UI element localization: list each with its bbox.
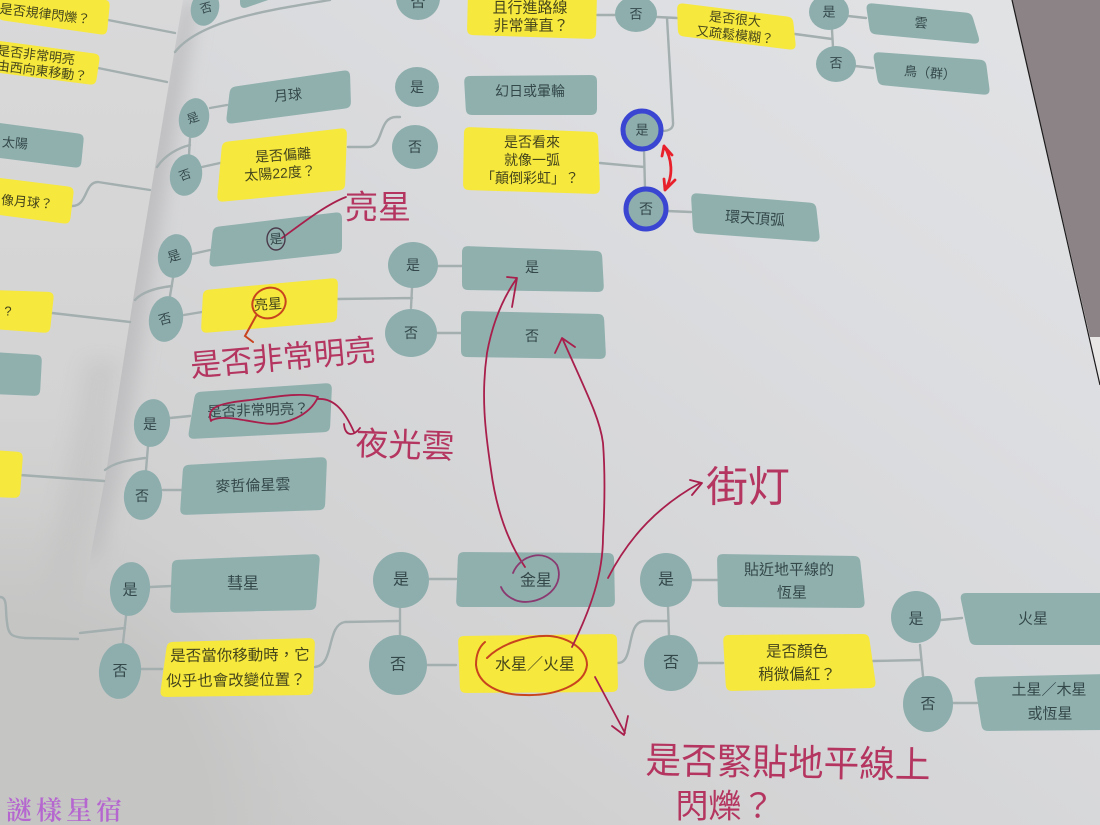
no node xyxy=(145,293,187,345)
handwritten annotations xyxy=(189,188,931,824)
no node: 否 xyxy=(408,139,422,155)
answer box: bright star xyxy=(203,280,336,331)
note: is it flickering near the horizon: 是否緊貼地平線上 xyxy=(645,740,931,786)
partial question xyxy=(0,292,52,331)
partial question: ? xyxy=(4,304,12,318)
answer: Saturn / Jupiter or star: 或恆星 xyxy=(1027,706,1073,722)
question: moves as you move: 似乎也會改變位置？ xyxy=(166,671,306,690)
answer: Venus: 金星 xyxy=(520,572,552,590)
answer: Saturn / Jupiter or star: 土星／木星 xyxy=(1011,682,1087,698)
note: bright star, with pointer xyxy=(267,188,411,250)
no node: 否 xyxy=(135,488,149,504)
question: straight path: 非常筆直？ xyxy=(493,18,569,34)
answer: moon: 月球 xyxy=(273,86,303,104)
question: large and loose xyxy=(679,5,794,48)
answer: Mercury / Mars xyxy=(460,636,616,691)
no node xyxy=(369,635,427,695)
question: inverted rainbow: 是否看來 xyxy=(504,134,560,150)
question: looks like the moon xyxy=(0,179,72,222)
answer: Venus xyxy=(458,554,613,605)
yes node: 是 xyxy=(908,610,924,628)
answer: sundog or halo xyxy=(466,77,595,113)
note: flickering: 閃爍？ xyxy=(676,788,774,824)
yes node: 是 xyxy=(165,247,183,265)
desk behind the book xyxy=(1012,0,1100,337)
bottom flowchart row xyxy=(96,552,1100,732)
answer: cloud: 雲 xyxy=(914,15,928,31)
answer: star near the horizon: 恆星 xyxy=(777,584,807,602)
highlighted yes node: 是 xyxy=(635,122,649,138)
arrow from Mercury/Mars to no box xyxy=(555,338,604,647)
red double arrow xyxy=(662,146,675,190)
page gutter shadow xyxy=(75,0,198,560)
answer: star near the horizon xyxy=(719,556,863,606)
yes node: 是 xyxy=(122,582,138,598)
connector lines xyxy=(0,0,977,703)
question: large and loose: 又疏鬆模糊？ xyxy=(695,23,775,47)
no node: 否 xyxy=(177,166,193,184)
yes node: 是 xyxy=(393,572,409,588)
page edge xyxy=(1012,0,1100,385)
yes node xyxy=(131,397,173,449)
answer: comet xyxy=(172,556,318,611)
answer: Saturn / Jupiter or star xyxy=(976,676,1100,729)
circle on Venus xyxy=(501,555,559,602)
circle and arrow on bright star xyxy=(245,282,291,342)
answer: cloud xyxy=(868,5,978,42)
answer: no: 否 xyxy=(525,328,539,344)
answer box: bright star: 亮星 xyxy=(253,295,283,313)
no node: 否 xyxy=(404,325,418,341)
no node xyxy=(816,46,856,82)
answer: yes: 是 xyxy=(525,259,539,275)
answer box: yes, annotated xyxy=(211,214,340,265)
partial question xyxy=(0,452,21,496)
note: bright star, with pointer: 亮星 xyxy=(345,188,411,226)
no node: 否 xyxy=(390,656,406,674)
no node xyxy=(385,309,437,357)
no node xyxy=(166,151,206,199)
no node xyxy=(396,0,440,20)
yes node xyxy=(640,553,692,607)
yes node xyxy=(388,242,438,288)
question: 22 degrees from sun: 是否偏離 xyxy=(255,145,311,165)
no node: 否 xyxy=(112,662,128,680)
highlighted no node xyxy=(626,189,666,229)
yes node xyxy=(154,231,196,281)
circled phrase with arrow to note xyxy=(210,395,360,434)
question: very bright: 是否非常明亮？ xyxy=(207,399,309,421)
no node xyxy=(903,676,953,732)
question: moves as you move xyxy=(162,640,313,695)
no node, page top: 否 xyxy=(198,0,214,16)
answer: Mercury / Mars: 水星／火星 xyxy=(495,656,575,674)
no node xyxy=(121,468,165,522)
lower page tone blending the fold xyxy=(0,505,320,825)
answer: star near the horizon: 貼近地平線的 xyxy=(744,562,834,578)
yes node: 是 xyxy=(143,416,157,432)
yes node xyxy=(395,67,439,107)
paper sheet under the book xyxy=(1090,337,1100,385)
no node: 否 xyxy=(920,696,936,712)
note: noctilucent cloud: 夜光雲 xyxy=(355,425,455,465)
answer: Mars xyxy=(962,595,1100,643)
question: moves as you move: 是否當你移動時，它 xyxy=(170,646,310,665)
no node xyxy=(96,641,144,701)
shadow on left page near the fold xyxy=(78,368,110,502)
yes node xyxy=(107,560,153,618)
yes node xyxy=(809,0,849,30)
answer: sun: 太陽 xyxy=(1,134,29,152)
question: regular flashing: 是否規律閃爍？ xyxy=(0,1,91,27)
arrow to street light note xyxy=(608,464,790,578)
question: inverted rainbow: 「顛倒彩虹」？ xyxy=(481,170,579,186)
question: slightly red xyxy=(725,636,874,689)
circle on Mercury and Mars xyxy=(476,636,587,695)
highlighted yes node xyxy=(623,111,661,149)
yes node: 是 xyxy=(822,4,836,20)
no node: 否 xyxy=(829,56,843,70)
no node: 否 xyxy=(157,310,173,328)
answer: birds xyxy=(875,54,988,93)
answer: sun xyxy=(0,124,82,166)
question: slightly red: 是否顏色 xyxy=(766,642,828,660)
no node: 否 xyxy=(663,654,679,672)
arrow to street light note: 街灯 xyxy=(706,464,790,510)
left page: facing flowchart fragments xyxy=(0,0,108,496)
question: slightly red: 稍微偏紅？ xyxy=(758,666,836,684)
answer: birds: 鳥（群） xyxy=(903,63,957,83)
highlighted no node: 否 xyxy=(639,201,653,217)
question: inverted rainbow: 就像一弧 xyxy=(504,152,560,168)
arrow from Venus to yes box xyxy=(484,277,525,567)
left facing page xyxy=(0,0,183,825)
no node xyxy=(392,125,438,169)
question: regular flashing xyxy=(0,0,108,33)
answer: Mars: 火星 xyxy=(1018,610,1048,628)
answer: no xyxy=(463,313,604,357)
yes node: 是 xyxy=(658,572,674,588)
answer box: yes, annotated: 是 xyxy=(269,231,283,247)
answer: yes xyxy=(464,248,602,290)
arrow to horizon note xyxy=(595,677,628,735)
moon and halo branch xyxy=(166,67,818,240)
note: is it very bright: 是否非常明亮 xyxy=(189,332,377,384)
bright star branch xyxy=(121,214,604,522)
answer: circumzenithal arc xyxy=(693,195,818,240)
top flowchart row xyxy=(187,0,988,93)
no node: 否 xyxy=(629,6,643,22)
question: very bright, moving west to east xyxy=(0,42,98,84)
question: very bright xyxy=(190,385,330,437)
yes node xyxy=(891,591,941,643)
partial answer box xyxy=(242,0,285,7)
question: 22 degrees from sun xyxy=(219,130,345,200)
question: straight path xyxy=(469,0,595,37)
partial answer box xyxy=(0,354,40,394)
answer: circumzenithal arc: 環天頂弧 xyxy=(724,208,786,230)
answer: moon xyxy=(228,72,349,122)
yes node: 是 xyxy=(185,109,201,127)
yes node: 是 xyxy=(406,257,420,273)
question: looks like the moon: 像月球？ xyxy=(0,192,54,212)
question: 22 degrees from sun: 太陽22度？ xyxy=(244,163,316,183)
no node xyxy=(615,0,657,32)
yes node xyxy=(373,552,429,608)
answer: sundog or halo: 幻日或暈輪 xyxy=(495,83,565,99)
question: inverted rainbow xyxy=(465,129,598,192)
question: large and loose: 是否很大 xyxy=(708,9,762,29)
answer: Magellanic cloud: 麥哲倫星雲 xyxy=(215,476,291,496)
answer: comet: 彗星 xyxy=(227,574,259,592)
no node xyxy=(644,635,698,691)
no node, page top xyxy=(187,0,223,29)
yes node: 是 xyxy=(410,79,424,95)
answer: Magellanic cloud xyxy=(182,459,325,513)
question: straight path: 且行進路線 xyxy=(492,0,568,16)
yes node xyxy=(175,95,213,141)
